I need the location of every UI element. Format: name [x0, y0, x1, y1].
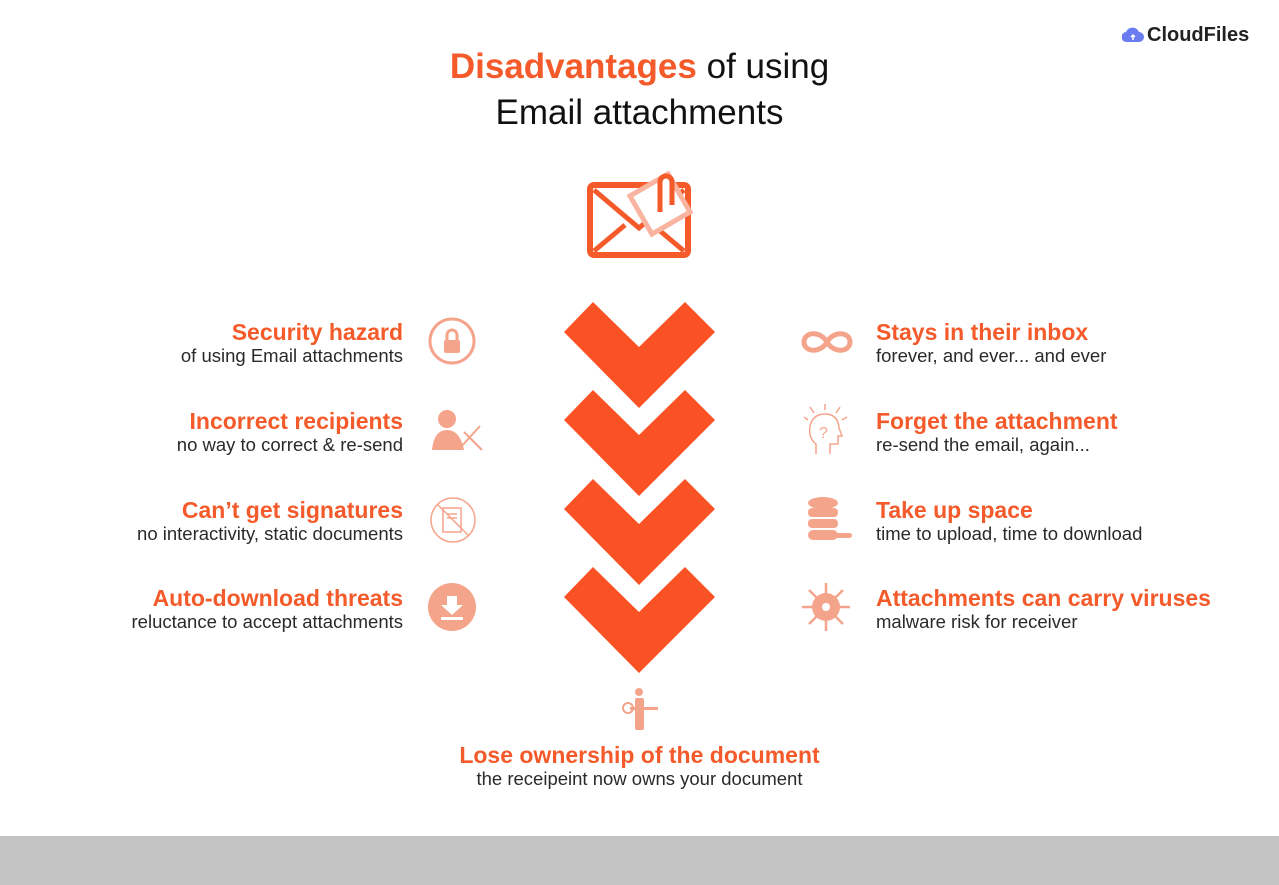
item: lose ownership: Lose ownership of the document [459, 742, 820, 768]
icon: no signature [430, 497, 476, 543]
item: security hazard [181, 319, 403, 366]
icon: user x [432, 410, 483, 451]
item: viruses: malware risk for receiver [876, 611, 1078, 632]
item: viruses: Attachments can carry viruses [876, 585, 1211, 611]
footer bar [0, 836, 1279, 885]
item: stays in inbox: Stays in their inbox [876, 319, 1088, 345]
icon: head question: ? [819, 425, 828, 442]
item: signatures: Can’t get signatures [182, 497, 403, 523]
logo: CloudFiles [1147, 24, 1249, 46]
icon: database [808, 497, 852, 540]
title: Email attachments [496, 93, 783, 132]
item: forget attachment [876, 408, 1118, 455]
item: auto-download: Auto-download threats [153, 585, 403, 611]
icon: virus [802, 583, 850, 631]
icon: lock [428, 318, 476, 364]
item: take up space: Take up space [876, 497, 1033, 523]
item: auto-download [132, 585, 403, 632]
item: forget attachment: Forget the attachment [876, 408, 1118, 434]
item: incorrect recipients: Incorrect recipients [190, 408, 403, 434]
item: take up space [876, 497, 1142, 544]
item: auto-download: reluctance to accept attachments [132, 611, 403, 632]
item: stays in inbox [876, 319, 1106, 366]
item: lose ownership [459, 742, 820, 789]
icon: email with attachment [587, 170, 694, 258]
item: signatures [137, 497, 403, 544]
title: Disadvantages of using [450, 47, 829, 86]
item: lose ownership: the receipeint now owns your document [476, 768, 802, 789]
icon: infinity [802, 331, 852, 353]
item: incorrect recipients: no way to correct & re-send [177, 434, 403, 455]
icon: person with key [622, 688, 658, 730]
item: forget attachment: re-send the email, again... [876, 434, 1090, 455]
item: viruses [876, 585, 1211, 632]
icon: download [428, 583, 476, 631]
item: security hazard: of using Email attachments [181, 345, 403, 366]
item: take up space: time to upload, time to download [876, 523, 1142, 544]
item: incorrect recipients [177, 408, 403, 455]
item: security hazard: Security hazard [232, 319, 403, 345]
icon: head question [804, 404, 848, 454]
item: signatures: no interactivity, static documents [137, 523, 403, 544]
title [450, 47, 829, 132]
item: stays in inbox: forever, and ever... and ever [876, 345, 1106, 366]
